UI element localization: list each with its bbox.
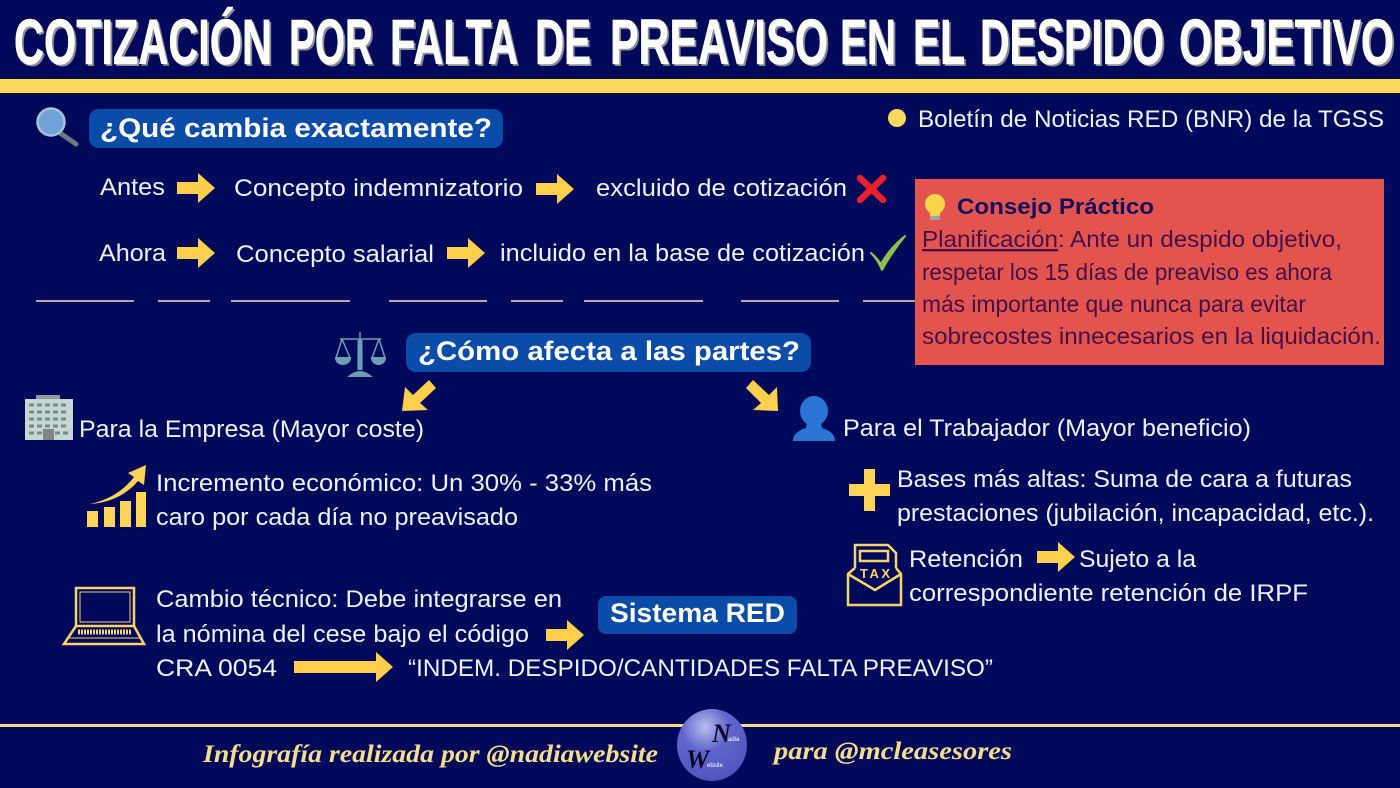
text: cambio tecnico — [156, 586, 562, 682]
title: POR — [289, 6, 373, 78]
title: PREAVISO — [610, 6, 828, 78]
text: bases mas altas: prestaciones (jubilación, incapacidad, etc.). — [897, 500, 1374, 527]
logo: ebsite — [707, 763, 724, 769]
advice text: más importante que nunca para evitar — [922, 291, 1306, 317]
title: EN — [842, 8, 898, 80]
footer recipient: para @mcleasesores — [772, 738, 1012, 765]
text: cambio tecnico: la nómina del cese bajo el código — [156, 621, 529, 648]
icon: person — [793, 396, 835, 441]
title: COTIZACIÓN — [16, 8, 274, 80]
title: DE — [537, 8, 593, 80]
text: incremento economico — [156, 470, 652, 531]
logo: N — [711, 719, 732, 748]
icon: growth chart — [87, 465, 146, 527]
title: EL — [913, 6, 965, 78]
panel: consejo practico — [915, 179, 1384, 365]
title: PREAVISO — [612, 8, 830, 80]
row: antes: Antes — [100, 174, 165, 201]
text: bases mas altas — [897, 466, 1374, 527]
subheading: empresa: Para la Empresa (Mayor coste) — [79, 416, 424, 443]
advice text: Planificación: Ante un despido objetivo, — [922, 226, 1342, 252]
label: sistema red: Sistema RED — [610, 598, 785, 628]
row: ahora: Ahora — [99, 240, 167, 267]
source note: Boletín de Noticias RED (BNR) de la TGSS — [918, 106, 1384, 133]
title: POR — [291, 8, 375, 80]
label: sistema red — [598, 596, 797, 634]
text: bases mas altas: Bases más altas: Suma de cara a futuras — [897, 466, 1352, 493]
subheading: trabajador: Para el Trabajador (Mayor beneficio) — [843, 415, 1251, 442]
row: ahora: incluido en la base de cotización — [500, 240, 865, 267]
heading: como afecta: ¿Cómo afecta a las partes? — [418, 336, 800, 366]
heading: consejo: Consejo Práctico — [957, 194, 1154, 219]
text: cambio tecnico: Cambio técnico: Debe integrarse en — [156, 586, 562, 613]
heading: que cambia: ¿Qué cambia exactamente? — [100, 113, 492, 143]
title: DESPIDO — [980, 6, 1164, 78]
icon: magnifying glass — [38, 108, 76, 144]
title: COTIZACIÓN — [14, 6, 272, 78]
arrow: to sistema red — [546, 620, 584, 650]
text: retencion — [909, 542, 1308, 607]
footer credit: Infografía realizada por @nadiawebsite — [202, 741, 658, 768]
icon: scales — [336, 332, 385, 376]
text: retencion: correspondiente retención de IRPF — [909, 580, 1308, 607]
row: ahora — [99, 236, 905, 270]
text: incremento economico: caro por cada día no preavisado — [156, 504, 518, 531]
advice text: sobrecostes innecesarios en la liquidación. — [922, 323, 1381, 349]
title: FALTA — [392, 8, 520, 80]
icon: laptop — [64, 588, 144, 644]
arrow: to empresa — [402, 380, 436, 411]
icon: plus — [849, 469, 890, 511]
arrow: long — [294, 652, 393, 682]
advice text: respetar los 15 días de preaviso es ahora — [922, 259, 1333, 285]
icon: office building — [25, 395, 73, 440]
title: FALTA — [390, 6, 518, 78]
logo — [677, 709, 747, 781]
row: antes: excluido de cotización — [596, 175, 847, 202]
heading: como afecta — [406, 333, 811, 372]
row: antes: Concepto indemnizatorio — [234, 175, 523, 202]
title: DE — [535, 6, 591, 78]
title: EN — [840, 6, 896, 78]
title: DESPIDO — [982, 8, 1166, 80]
logo: W — [686, 745, 711, 774]
logo: adia — [728, 737, 740, 743]
advice text — [922, 226, 1381, 349]
text: retencion: Sujeto a la — [1079, 546, 1197, 573]
heading: que cambia — [89, 109, 503, 148]
title — [14, 6, 1396, 80]
text: cra concept: “INDEM. DESPIDO/CANTIDADES FALTA PREAVISO” — [408, 655, 993, 682]
text: incremento economico: Incremento económico: Un 30% - 33% más — [156, 470, 652, 497]
icon: tax envelope — [848, 545, 901, 605]
row: antes — [100, 173, 883, 204]
row: ahora: Concepto salarial — [236, 241, 434, 268]
text: cambio tecnico: CRA 0054 — [156, 655, 277, 682]
header band — [0, 78, 1400, 95]
arrow: to trabajador — [746, 380, 778, 411]
text: retencion: Retención — [909, 546, 1023, 573]
title: EL — [915, 8, 967, 80]
icon: light bulb — [925, 194, 945, 220]
icon: tax envelope: TAX — [860, 566, 890, 581]
